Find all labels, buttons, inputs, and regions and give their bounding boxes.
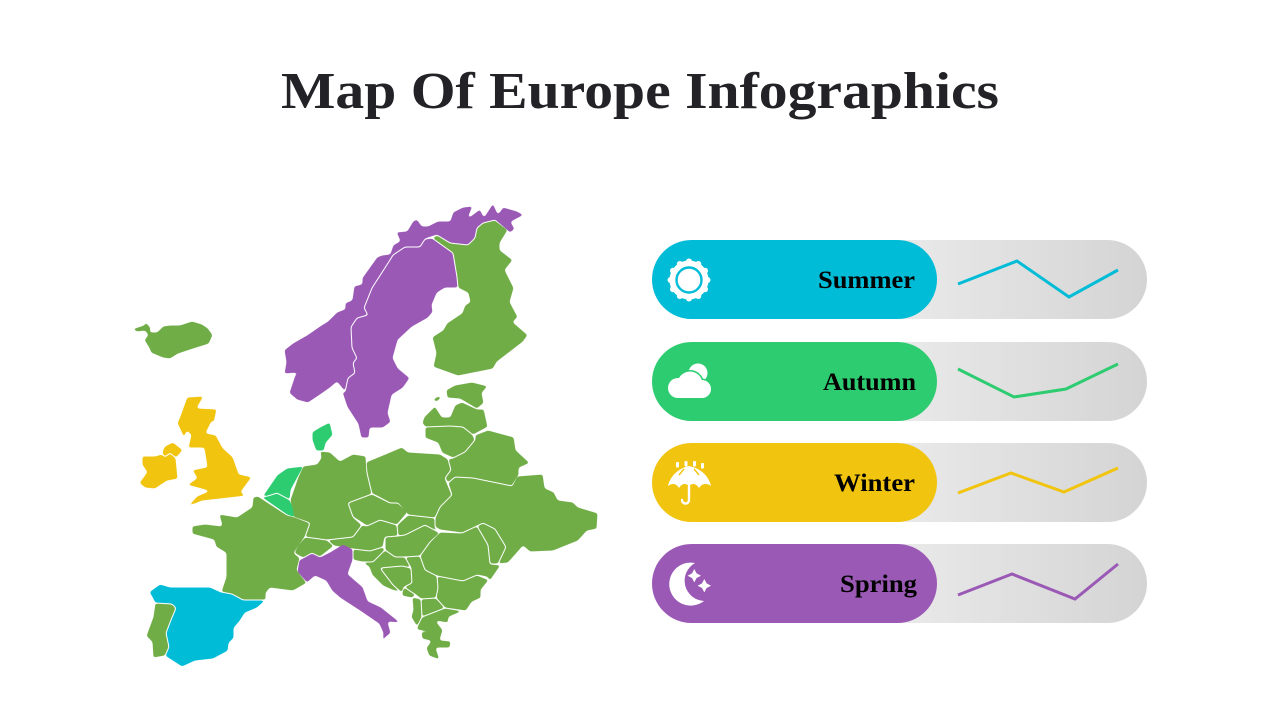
country: Ireland — [139, 453, 178, 489]
map of Europe — [132, 203, 598, 667]
title: Map Of Europe Infographics — [281, 63, 999, 120]
country: Hungary — [385, 525, 440, 557]
country: France — [192, 496, 310, 600]
row: Summer — [652, 240, 1147, 319]
country: Croatia — [362, 550, 411, 593]
country: Lithuania — [425, 426, 475, 458]
country: Finland — [432, 220, 528, 376]
country: Montenegro — [402, 587, 416, 598]
country: Netherlands — [262, 466, 304, 500]
line chart — [958, 261, 1118, 297]
label: Autumn — [823, 369, 916, 396]
line chart — [958, 564, 1118, 599]
country: Czechia — [348, 494, 408, 526]
track — [652, 342, 1147, 421]
pill — [652, 240, 937, 319]
track — [652, 544, 1147, 623]
icon: sun — [668, 258, 710, 302]
country: Belgium — [261, 493, 295, 518]
country: Belarus — [445, 430, 530, 486]
label: Spring — [840, 571, 918, 598]
country: Poland — [366, 447, 452, 518]
row: Winter — [652, 443, 1147, 522]
country: North Macedonia — [421, 598, 445, 617]
country: Latvia — [422, 402, 488, 435]
country: Bosnia — [380, 566, 412, 593]
line chart — [958, 468, 1118, 493]
track — [652, 443, 1147, 522]
label: Winter — [834, 470, 915, 497]
row: Autumn — [652, 342, 1147, 421]
country: Serbia — [404, 556, 438, 599]
country: Bulgaria — [436, 575, 489, 611]
icon: cloud and sun — [668, 364, 711, 398]
icon: moon and stars — [669, 563, 711, 606]
country: Austria — [327, 520, 398, 551]
pill — [652, 443, 937, 522]
icon: umbrella with rain — [668, 461, 711, 504]
track — [652, 240, 1147, 319]
country: Slovakia — [397, 515, 440, 536]
country: Greece — [417, 608, 463, 660]
country: Sweden — [342, 238, 458, 438]
country: Switzerland — [294, 537, 334, 558]
country: Great Britain — [177, 396, 252, 507]
row: Spring — [652, 544, 1147, 623]
country: Moldova — [477, 523, 506, 564]
island: Saaremaa — [432, 396, 442, 402]
country: Slovenia — [353, 547, 385, 562]
label: Summer — [818, 267, 915, 294]
country: Norway — [284, 203, 524, 403]
country: Estonia — [446, 382, 488, 409]
country: Albania — [411, 597, 422, 627]
country: Spain — [149, 584, 266, 667]
country: Denmark — [312, 422, 333, 451]
country: Germany — [290, 451, 372, 540]
country: Italy — [297, 544, 401, 646]
country: Ukraine — [435, 474, 598, 564]
country: Romania — [420, 526, 501, 581]
country: Northern Ireland — [162, 442, 183, 458]
pill — [652, 342, 937, 421]
country: Portugal — [146, 603, 176, 658]
pill — [652, 544, 937, 623]
country: Iceland — [132, 321, 213, 359]
line chart — [958, 364, 1118, 397]
